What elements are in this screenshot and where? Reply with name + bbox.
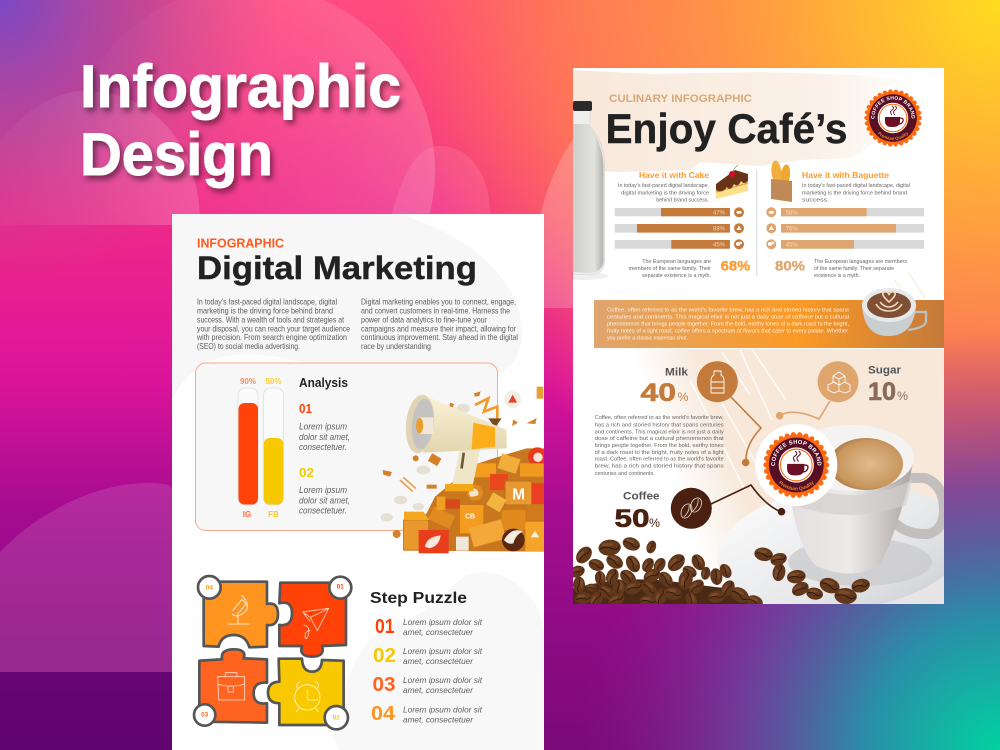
column: have it with cake: In today's fast-paced digital landscape, <box>618 183 709 189</box>
column: have it with baguette: marketing is the driving force behind brand <box>802 190 907 196</box>
text block: intro right: and convert customers in real-time. Harness the <box>361 306 510 316</box>
icon: cake slice <box>716 165 748 199</box>
puzzle piece 03: 03 <box>201 711 209 718</box>
text block: intro right: Digital marketing enables you to connect, engage, <box>361 298 516 306</box>
stat: 68% <box>629 259 750 278</box>
stat: 80% <box>775 259 907 278</box>
callout: sugar: % <box>897 389 908 403</box>
icon: latte cup <box>862 288 926 336</box>
column: have it with cake: digital marketing is the driving force <box>621 190 709 196</box>
puzzle piece 01: 01 <box>337 584 344 591</box>
bar chart: IG and FB tubes: 90% <box>240 377 256 386</box>
text block: coffee paragraph <box>595 415 724 477</box>
bar chart: IG and FB tubes: FB <box>268 510 279 519</box>
white badge backdrop <box>755 424 837 506</box>
icon: baguette bag <box>770 160 792 202</box>
badge: coffee shop brand: Premium Quality <box>878 132 908 140</box>
column: have it with cake: Have it with Cake <box>639 171 709 180</box>
main title <box>80 53 401 188</box>
icon: coffee beans <box>679 496 704 520</box>
analysis item 01: dolor sit amet, <box>299 432 350 442</box>
connector: coffee <box>711 485 784 515</box>
milk bottle <box>573 101 608 280</box>
orange band with coffee text: you prefer a classic espresso shot. <box>607 336 688 342</box>
puzzle piece 04 <box>198 576 278 647</box>
step list: 03 <box>372 674 396 696</box>
callout: sugar: 10 <box>868 378 896 406</box>
panel: digital marketing card <box>172 214 547 750</box>
brush background top <box>573 70 888 172</box>
text block: intro left: (SEO) to social media advertising. <box>197 342 300 351</box>
callout: coffee <box>614 488 712 533</box>
analysis item 02: dolor sit amet, <box>299 495 350 505</box>
callout: milk: 40 <box>640 379 676 407</box>
text block: coffee paragraph: roast. Coffee, often referred to as the world's favorite <box>595 457 724 463</box>
callout: milk <box>640 361 738 407</box>
stat: 80%: The European languages are members <box>814 259 908 265</box>
stat: 80%: 80% <box>775 258 806 274</box>
badge: coffee shop brand centre <box>763 432 830 498</box>
analysis item 01: consectetuer. <box>299 442 347 452</box>
orange band with coffee text: centuries and continents. This magical elixir is not just a daily dose of caffeine but a cultural <box>607 314 849 320</box>
callout: sugar <box>818 361 908 406</box>
text block: coffee paragraph: brings people together. From the bold, earthy tones <box>595 443 724 449</box>
connector: milk <box>731 397 761 466</box>
text block: coffee paragraph: brew, has a rich and storied history that spans <box>595 464 724 470</box>
stat: 68%: The European languages are <box>642 259 711 265</box>
text block: intro left: success. With a wealth of tools and strategies at <box>197 316 345 324</box>
puzzle piece 03 <box>194 649 267 726</box>
column: have it with cake: behind brand success. <box>656 198 709 204</box>
stat: 80%: of the same family. Their separate <box>814 266 894 272</box>
bar chart: cake: 47% <box>713 210 726 216</box>
analysis item 01: Lorem ipsum <box>299 422 347 432</box>
step list: amet, consectetuer <box>403 627 474 637</box>
step list: amet, consectetuer <box>403 715 474 725</box>
bar chart: cake: 45% <box>713 242 726 248</box>
heading: infographic: INFOGRAPHIC <box>197 236 284 250</box>
text block: intro right: power of data analytics to fine-tune your <box>361 316 487 324</box>
analysis item 02 <box>299 468 349 514</box>
step list: 02 <box>373 645 396 667</box>
analysis item 01: 01 <box>299 401 312 416</box>
step puzzle heading: Step Puzzle <box>370 590 467 607</box>
main title: Infographic <box>80 53 401 120</box>
connector: sugar <box>777 401 830 419</box>
analysis item 02: consectetuer. <box>299 506 347 516</box>
illustration: megaphone and marketing blocks <box>380 387 547 553</box>
bar chart: baguette <box>766 207 924 249</box>
puzzle piece 01 <box>279 577 351 657</box>
step list: Lorem ipsum dolor sit <box>403 617 483 627</box>
badge: coffee shop brand centre: Premium Quality <box>778 480 814 491</box>
callout: coffee: 50 <box>614 505 650 533</box>
bar chart: IG and FB tubes: 50% <box>265 377 282 386</box>
text block: coffee paragraph: of a dark roast to the bright, fruity notes of a light <box>595 450 724 456</box>
icon: sugar cubes <box>828 372 850 393</box>
text block: coffee paragraph: Coffee, often referred to as the world's favorite brew, <box>595 415 724 421</box>
text block: intro left: In today's fast-paced digital landscape, digital <box>197 298 337 306</box>
step list: amet, consectetuer <box>403 685 474 695</box>
badge: coffee shop brand <box>864 89 922 147</box>
icon: milk bottle <box>711 371 724 393</box>
badge: coffee shop brand: COFFEE SHOP BRAND <box>871 96 915 119</box>
bar chart: baguette: 45% <box>786 242 798 248</box>
callout: coffee: % <box>649 516 660 530</box>
puzzle <box>194 576 351 729</box>
analysis item 01 <box>299 404 349 450</box>
step list: amet, consectetuer <box>403 656 474 666</box>
blocks pile: M <box>512 486 525 503</box>
text block: intro left: with precision. From search engine optimization <box>196 333 347 342</box>
step list: 01 <box>375 616 394 638</box>
stat: 68%: separate existence is a myth. <box>642 273 711 279</box>
text block: coffee paragraph: dose of caffeine but a cultural phenomenon that <box>595 436 724 442</box>
step list: Lorem ipsum dolor sit <box>403 675 483 685</box>
text block: intro right <box>361 298 518 351</box>
callout: milk: % <box>678 390 689 404</box>
step list <box>371 616 483 725</box>
orange band with coffee text: phenomenon that brings people together. From the bold, earthy tones of a dark roast to the bright, <box>607 322 849 328</box>
bar chart: IG and FB tubes: IG <box>243 510 251 519</box>
blocks pile: CB <box>465 513 475 520</box>
step list: Lorem ipsum dolor sit <box>403 646 483 656</box>
text block: intro right: race by understanding <box>361 342 431 351</box>
blocks pile <box>403 447 547 553</box>
orange band with coffee text <box>594 288 944 348</box>
bar chart: baguette: 76% <box>786 226 798 232</box>
coffee cup photo <box>711 425 973 623</box>
heading: enjoy cafe's: Enjoy Café’s <box>606 105 848 152</box>
text block: intro left <box>196 298 350 351</box>
divider <box>756 170 758 276</box>
brush background bottom <box>645 349 944 604</box>
panel: enjoy cafe card <box>573 68 944 604</box>
panel: analysis <box>196 363 498 530</box>
analysis item 02: Lorem ipsum <box>299 485 347 495</box>
bar chart: baguette: 58% <box>786 210 798 216</box>
bar chart: cake <box>615 207 744 249</box>
text block: intro left: your disposal, you can reach your target audience <box>197 324 350 333</box>
callout: milk: Milk <box>665 367 689 379</box>
callout: coffee: Coffee <box>623 491 660 503</box>
stat: 68%: 68% <box>721 258 751 274</box>
text block: coffee paragraph: has a rich and storied history that spans centuries <box>595 422 724 428</box>
coffee beans <box>568 535 871 610</box>
column: have it with baguette: In today's fast-paced digital landscape, digital <box>802 183 910 189</box>
orange band with coffee text: fruity notes of a light roast, coffee offers a spectrum of flavors that cater to every palate. Whether <box>607 328 848 334</box>
analysis heading: Analysis <box>299 375 348 390</box>
column: have it with cake <box>615 165 751 279</box>
puzzle piece 02: 02 <box>333 714 340 721</box>
text block: coffee paragraph: centuries and continents. <box>595 471 655 477</box>
stat: 68%: members of the same family. Their <box>629 266 711 272</box>
floating pieces <box>380 387 543 538</box>
badge: coffee shop brand centre: COFFEE SHOP BRAND <box>771 440 822 466</box>
column: have it with baguette <box>766 160 924 279</box>
megaphone <box>403 393 507 491</box>
stat: 80%: existence is a myth. <box>814 273 860 279</box>
bar chart: cake: 88% <box>713 226 726 232</box>
heading: digital marketing: Digital Marketing <box>197 250 477 286</box>
text block: intro right: campaigns and measure their impact, allowing for <box>361 324 516 333</box>
text block: intro right: continuous improvement. Stay ahead in the digital <box>361 333 518 342</box>
callout: sugar: Sugar <box>868 365 902 377</box>
orange band with coffee text: Coffee, often referred to as the world's favorite brew, has a rich and storied history that spans <box>607 308 850 314</box>
analysis item 02: 02 <box>299 465 314 480</box>
column: have it with baguette: success. <box>802 198 829 204</box>
step list: Lorem ipsum dolor sit <box>403 704 483 714</box>
puzzle piece 04: 04 <box>206 584 213 591</box>
main title: Design <box>80 121 273 188</box>
column: have it with baguette: Have it with Baguette <box>802 171 889 180</box>
puzzle piece 02 <box>268 659 348 729</box>
bar chart: IG and FB tubes <box>238 377 284 519</box>
text block: intro left: marketing is the driving force behind brand <box>197 306 333 316</box>
text block: coffee paragraph: and continents. This magical elixir is not just a daily <box>595 429 724 435</box>
heading: culinary infographic: CULINARY INFOGRAPHIC <box>609 93 752 105</box>
step list: 04 <box>371 703 396 725</box>
